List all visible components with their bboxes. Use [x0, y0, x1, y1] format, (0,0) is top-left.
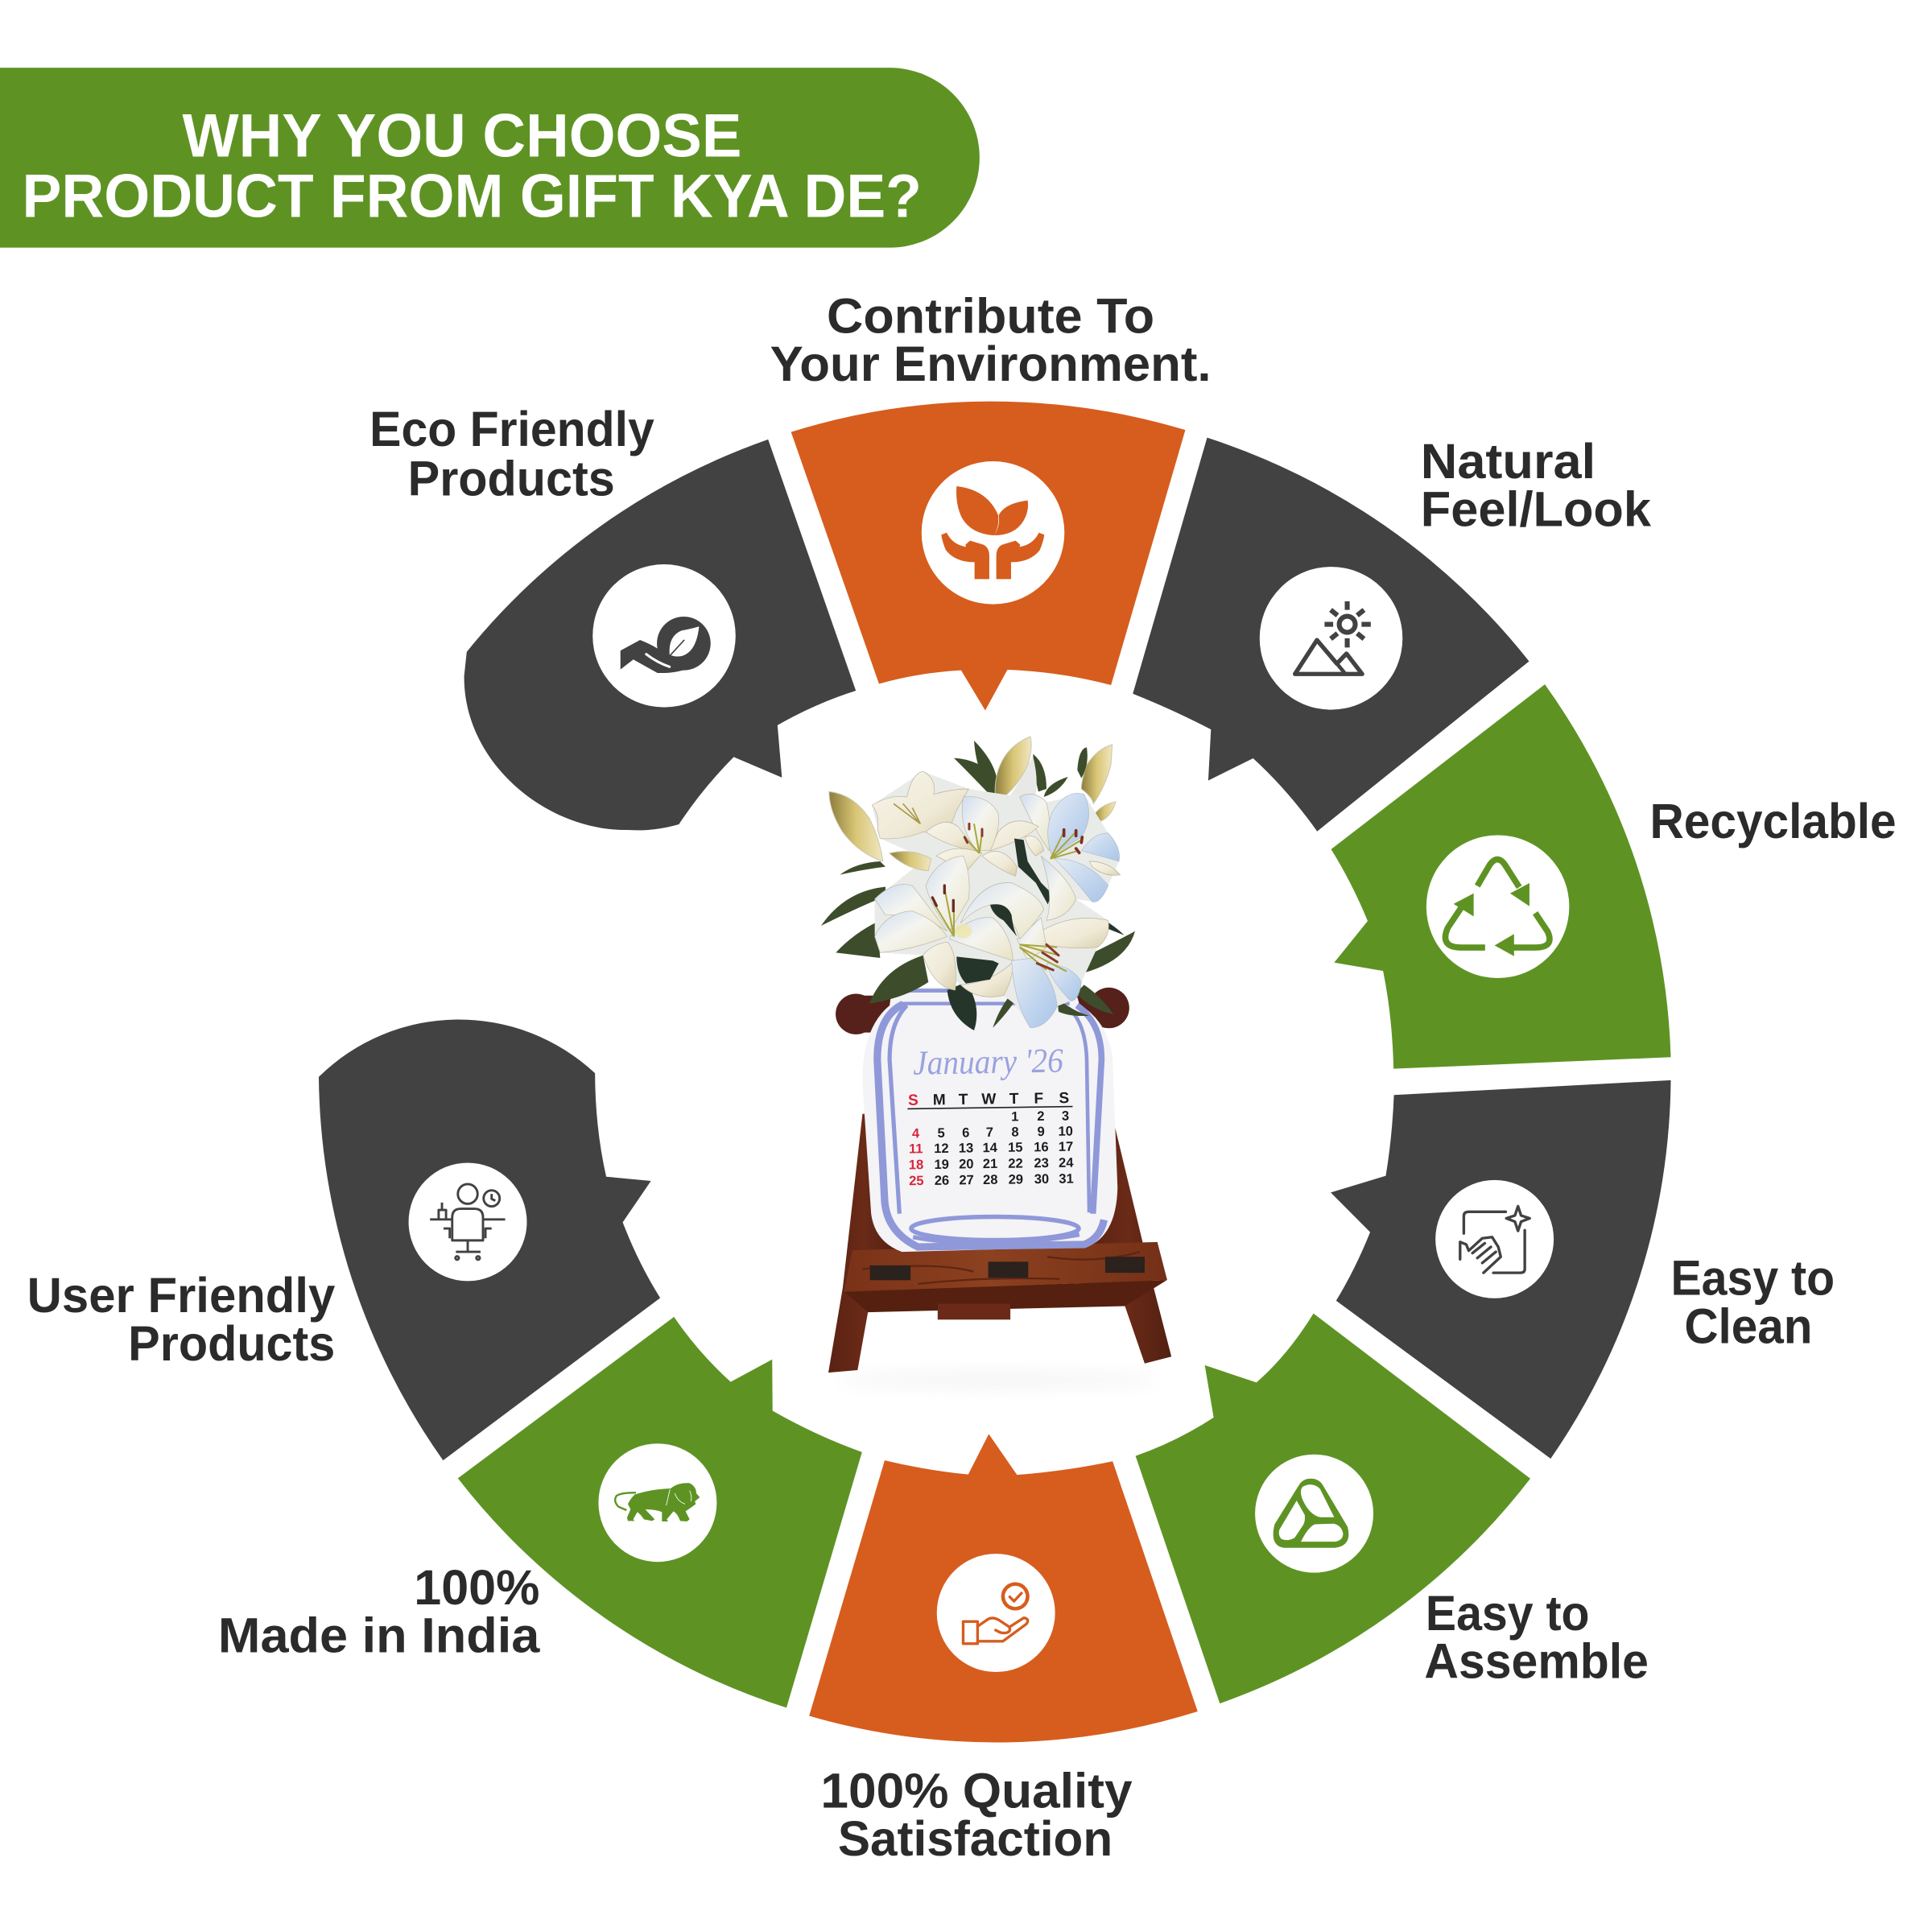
calendar grid: 24 — [1059, 1155, 1074, 1170]
calendar grid: 27 — [959, 1172, 974, 1187]
icon: person at desk — [430, 1184, 506, 1260]
label: 100% quality satisfaction — [820, 1763, 1133, 1866]
calendar grid: 18 — [909, 1157, 923, 1172]
calendar grid: T — [959, 1092, 968, 1108]
label: easy to assemble: Easy to — [1426, 1586, 1589, 1641]
calendar grid: W — [981, 1091, 997, 1108]
segment: contribute to environment — [791, 402, 1185, 711]
label: natural feel/look: Feel/Look — [1421, 482, 1652, 537]
dark foliage gaps: lower — [956, 904, 1017, 984]
segment: recyclable — [1331, 684, 1671, 1069]
calendar grid: 9 — [1037, 1124, 1045, 1139]
flower: upper left — [872, 771, 968, 839]
flower silhouette base — [872, 771, 1119, 1028]
flower: right large upper petal — [1041, 856, 1076, 920]
calendar heading: January '26 — [913, 1042, 1064, 1083]
calendar grid: M — [933, 1092, 946, 1108]
calendar grid: 16 — [1034, 1139, 1049, 1154]
label: 100% made in india — [218, 1560, 540, 1663]
label: user friendly products: User Friendly — [27, 1268, 335, 1323]
label: easy to assemble — [1424, 1586, 1649, 1689]
calendar grid: 14 — [982, 1140, 998, 1155]
icon: hand with badge — [963, 1584, 1028, 1644]
calendar grid: 6 — [962, 1125, 969, 1140]
calendar grid: 26 — [935, 1173, 949, 1188]
icon: assembled triangle — [1274, 1479, 1348, 1548]
calendar grid: 22 — [1008, 1155, 1023, 1171]
segment: quality satisfaction — [809, 1434, 1198, 1742]
calendar grid: 31 — [1059, 1170, 1074, 1187]
calendar grid: 21 — [983, 1156, 997, 1171]
segment: eco friendly — [464, 440, 856, 830]
calendar grid: 3 — [1062, 1108, 1069, 1124]
label: eco friendly products: Products — [408, 451, 615, 506]
calendar grid: 2 — [1037, 1108, 1045, 1124]
icon: hand holding leaf — [621, 617, 711, 673]
calendar grid: 1 — [1011, 1108, 1018, 1124]
calendar grid: 25 — [909, 1173, 924, 1188]
label: natural feel/look — [1421, 434, 1652, 537]
header banner — [0, 68, 980, 248]
calendar grid: 13 — [959, 1140, 973, 1156]
calendar grid: 20 — [959, 1156, 974, 1172]
label: user friendly products — [27, 1268, 335, 1371]
calendar grid: 10 — [1058, 1124, 1073, 1139]
calendar grid: 23 — [1034, 1155, 1049, 1170]
header banner: PRODUCT FROM GIFT KYA DE? — [23, 162, 922, 230]
calendar grid: 8 — [1011, 1124, 1019, 1140]
striped bud — [890, 852, 931, 871]
calendar grid: S — [1059, 1090, 1070, 1107]
calendar grid: 11 — [909, 1141, 923, 1157]
calendar grid — [907, 1090, 1075, 1188]
icon: hand wiping — [1460, 1206, 1530, 1273]
dark foliage gap: upper — [1014, 839, 1052, 904]
label: eco friendly products: Eco Friendly — [369, 402, 654, 456]
calendar grid: 15 — [1008, 1140, 1023, 1155]
header banner: WHY YOU CHOOSE — [183, 101, 741, 170]
segment: made in india — [458, 1317, 862, 1707]
stamens: lower right flower — [1020, 944, 1067, 972]
calendar grid: 4 — [912, 1125, 920, 1141]
flower: lower left — [875, 856, 1044, 990]
label: user friendly products: Products — [128, 1316, 335, 1371]
leaves — [821, 741, 1135, 1030]
segment: natural feel — [1133, 438, 1529, 832]
calendar grid: 28 — [983, 1172, 998, 1187]
label: eco friendly products — [369, 402, 654, 506]
calendar grid: 19 — [934, 1157, 949, 1172]
product: calendar on wooden easel with lilies — [821, 737, 1171, 1386]
label: contribute to your environment: Contribute To — [827, 288, 1154, 343]
icon: lion — [615, 1483, 700, 1521]
calendar grid: 29 — [1008, 1171, 1023, 1187]
segment: easy to clean — [1331, 1080, 1671, 1459]
icon: hands with plant — [941, 486, 1044, 579]
buds — [829, 737, 1116, 861]
label: contribute to your environment: Your Environment. — [770, 336, 1212, 391]
label: easy to clean: Easy to — [1671, 1251, 1835, 1306]
wooden easel — [828, 988, 1171, 1373]
label: contribute to your environment — [770, 288, 1212, 391]
floor shadow — [838, 1374, 1158, 1386]
calendar grid: S — [908, 1092, 919, 1109]
calendar grid: T — [1009, 1091, 1019, 1108]
segment: easy to assemble — [1136, 1314, 1530, 1703]
label: 100% quality satisfaction: 100% Quality — [820, 1763, 1133, 1818]
label: 100% made in india: 100% — [414, 1560, 539, 1615]
segment: user friendly — [319, 1019, 660, 1460]
calendar grid: 5 — [937, 1125, 945, 1141]
label: 100% made in india: Made in India — [218, 1608, 540, 1663]
lily bouquet — [821, 737, 1135, 1030]
label: natural feel/look: Natural — [1421, 434, 1596, 489]
calendar grid: F — [1034, 1090, 1043, 1108]
calendar grid: 12 — [934, 1141, 949, 1156]
icon: recycle arrows — [1445, 860, 1550, 956]
flower: upper middle — [926, 797, 1038, 876]
label: 100% quality satisfaction: Satisfaction — [838, 1811, 1113, 1866]
label: recyclable: Recyclable — [1649, 794, 1897, 848]
label: easy to clean — [1671, 1251, 1835, 1353]
calendar grid: 7 — [986, 1125, 993, 1140]
calendar grid: 30 — [1034, 1171, 1049, 1187]
jar calendar card — [862, 987, 1117, 1252]
flower: lower right — [960, 918, 1108, 1028]
calendar grid: 17 — [1059, 1139, 1073, 1154]
label: easy to clean: Clean — [1684, 1298, 1813, 1353]
flower: upper right blue — [1020, 793, 1121, 902]
label: easy to assemble: Assemble — [1424, 1634, 1649, 1689]
icon: sun and mountains — [1295, 601, 1371, 674]
